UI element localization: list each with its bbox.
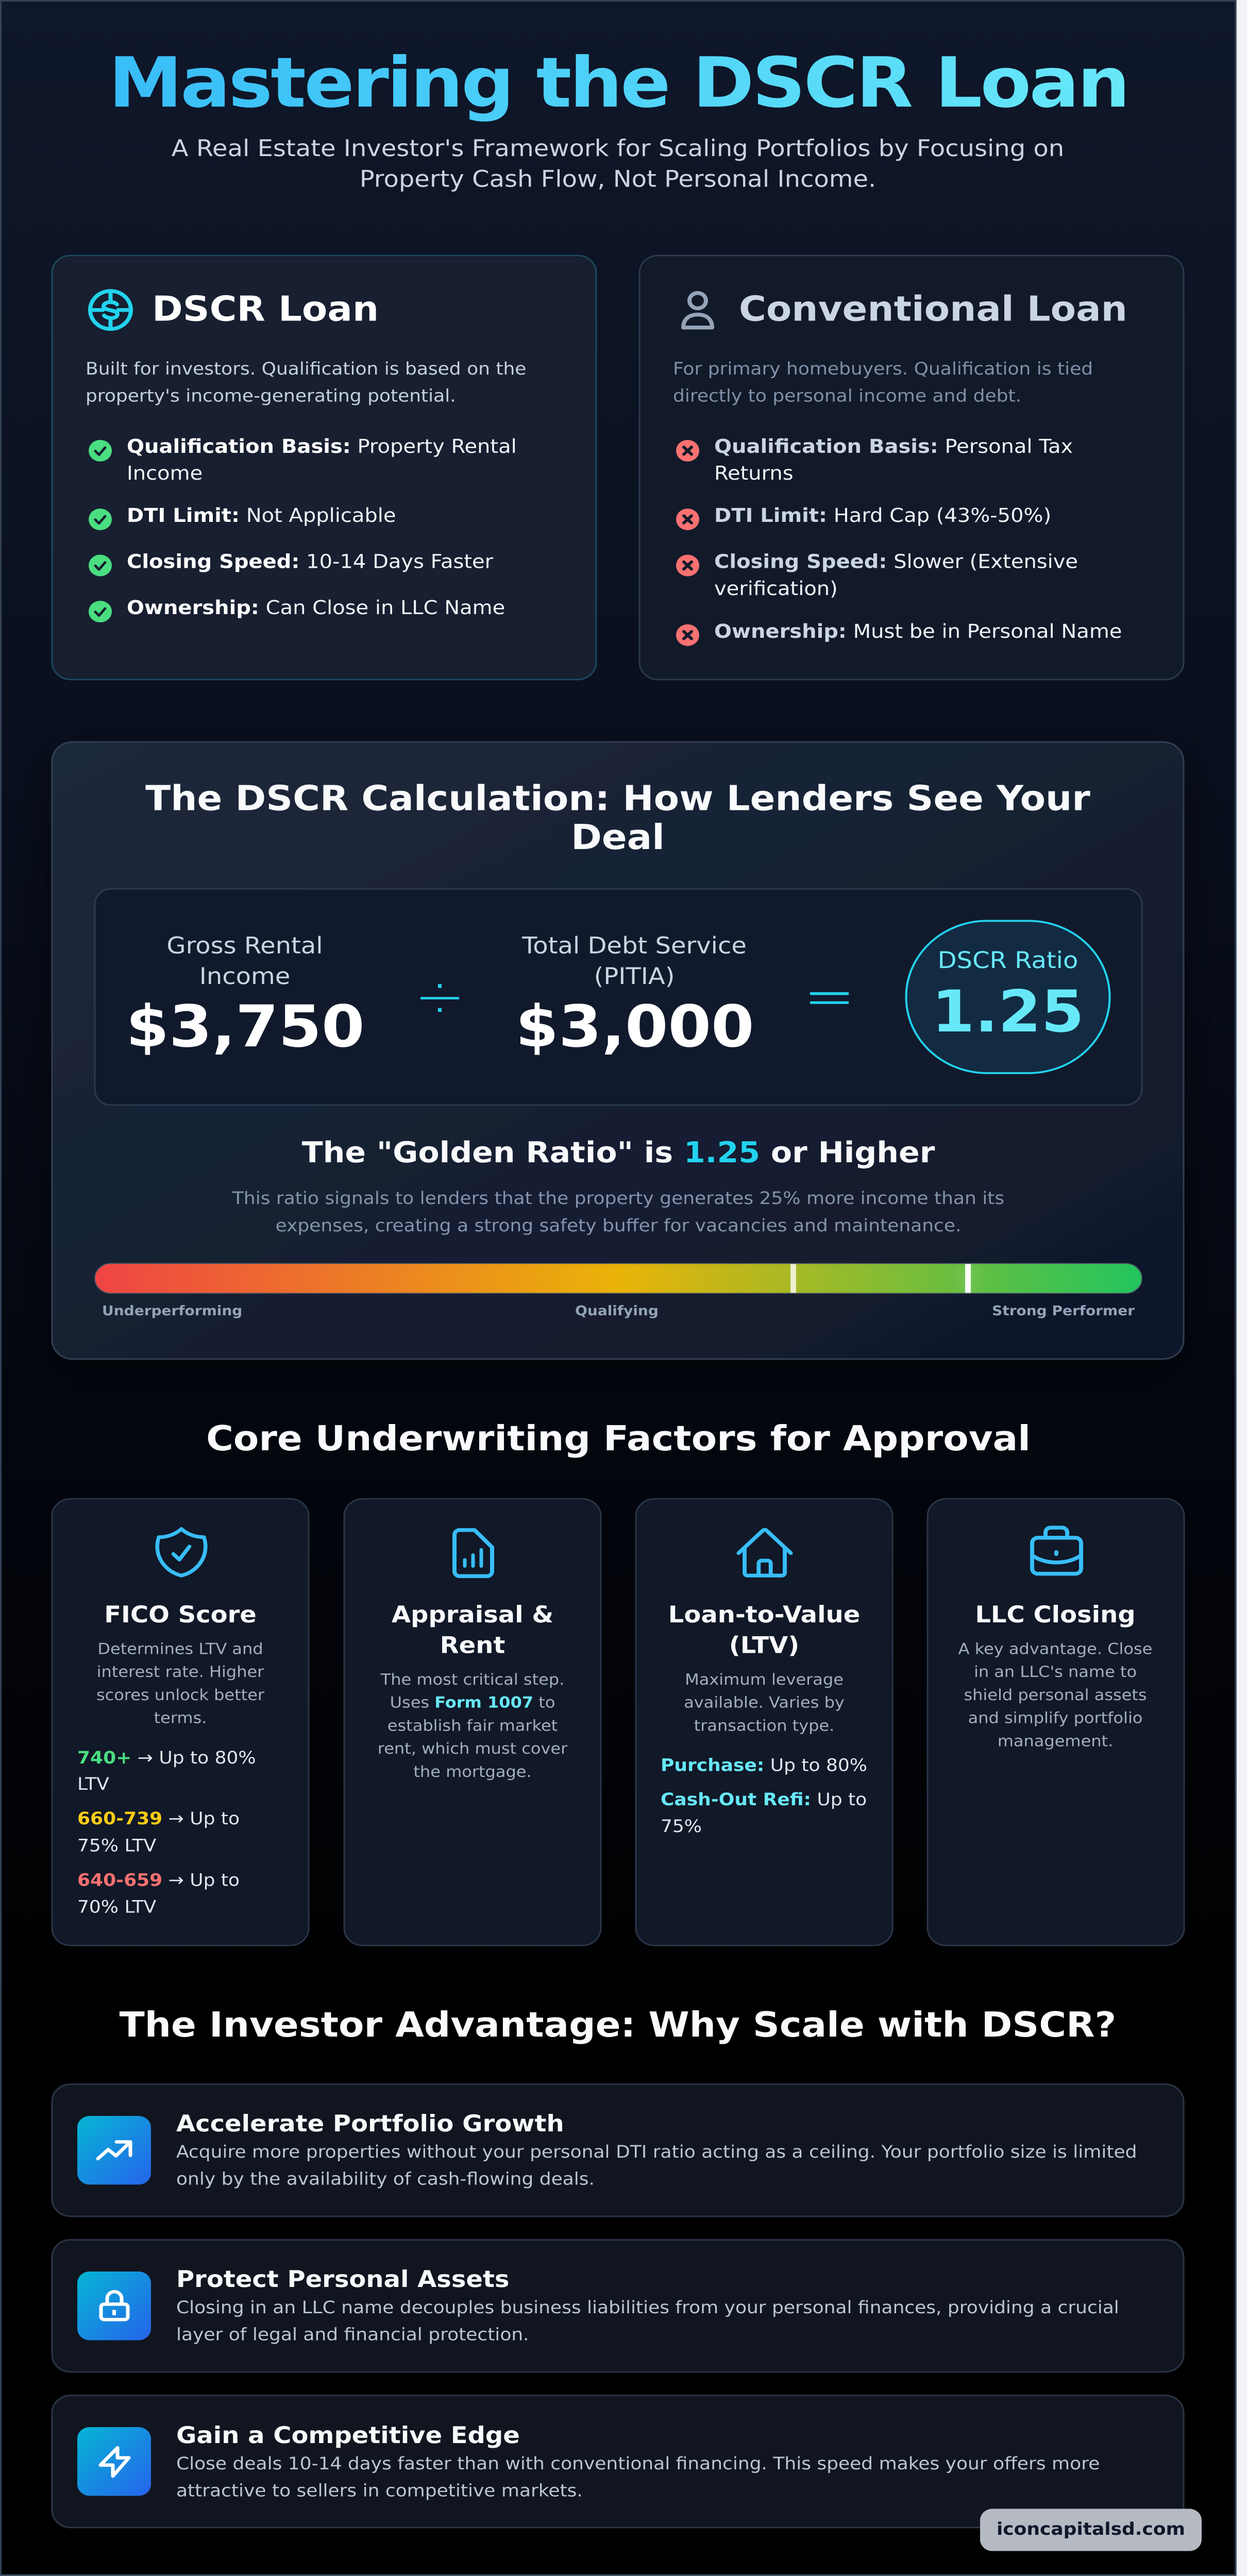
divide sign: [420, 984, 459, 1012]
item: closing speed: Closing Speed: Slower (Extensive: [714, 551, 1078, 573]
heading: DSCR Loan: [152, 289, 379, 329]
icon: document chart: [454, 1530, 492, 1576]
heading: Conventional Loan: [739, 289, 1127, 329]
golden ratio explanation: This ratio signals to lenders that the property generates 25% more income than its: [232, 1189, 1004, 1208]
total debt service: (PITIA): [594, 963, 675, 990]
card: LLC closing: [928, 1499, 1184, 1945]
golden ratio explanation: expenses, creating a strong safety buffer for vacancies and maintenance.: [276, 1216, 961, 1235]
item: ownership: Ownership: Must be in Personal Name: [714, 620, 1122, 642]
subtitle: Property Cash Flow, Not Personal Income.: [360, 166, 876, 193]
heading: (LTV): [729, 1632, 799, 1659]
heading: Gain a Competitive Edge: [176, 2422, 520, 2449]
description: The most critical step.: [380, 1670, 564, 1688]
description: For primary homebuyers. Qualification is tied: [673, 359, 1093, 379]
description: Maximum leverage: [685, 1670, 844, 1688]
icon: house: [738, 1530, 791, 1575]
gradient gauge: [95, 1263, 1142, 1293]
icon: bolt: [77, 2427, 151, 2496]
description: rent, which must cover: [378, 1739, 568, 1758]
icon: dollar target: [90, 291, 131, 329]
header: [109, 42, 1128, 193]
card: protect personal assets: [52, 2240, 1184, 2372]
heading: Protect Personal Assets: [176, 2266, 509, 2293]
tiers: LTV: [77, 1774, 109, 1794]
heading: Appraisal &: [392, 1601, 553, 1628]
description: management.: [998, 1732, 1113, 1750]
description: and simplify portfolio: [968, 1709, 1142, 1727]
description: transaction type.: [694, 1716, 834, 1735]
gross rental income: Income: [199, 963, 290, 990]
heading: Rent: [440, 1632, 505, 1659]
item: qualification basis: Qualification Basis: Property Rental: [127, 435, 517, 457]
icon: shield: [157, 1529, 206, 1575]
description: in an LLC's name to: [974, 1663, 1137, 1681]
gauge labels: Strong Performer: [992, 1303, 1135, 1319]
description: A key advantage. Close: [958, 1639, 1152, 1658]
LTV limits: Cash-Out Refi: Up to: [661, 1790, 867, 1809]
heading: Loan-to-Value: [668, 1601, 860, 1628]
tiers: 740+ → Up to 80%: [77, 1748, 256, 1768]
description: Built for investors. Qualification is based on the: [86, 359, 526, 379]
icon: lock: [77, 2272, 151, 2340]
item: closing speed: Closing Speed: 10-14 Days Faster: [127, 551, 494, 573]
heading: Accelerate Portfolio Growth: [176, 2110, 564, 2137]
golden ratio heading: The "Golden Ratio" is 1.25 or Higher: [302, 1136, 935, 1170]
total debt service: [515, 932, 754, 1060]
item: ownership: Ownership: Can Close in LLC Name: [127, 597, 505, 619]
panel: conventional loan: [639, 256, 1184, 680]
description: interest rate. Higher: [97, 1663, 264, 1681]
tiers: 75% LTV: [77, 1836, 157, 1856]
website badge: [980, 2509, 1202, 2551]
cross list: [676, 435, 1122, 646]
LTV limits: 75%: [661, 1817, 702, 1837]
heading: underwriting factors: Core Underwriting Factors for Approval: [206, 1418, 1031, 1459]
description: only by the availability of cash-flowing deals.: [176, 2169, 595, 2189]
gauge labels: [102, 1303, 1135, 1319]
description: Uses Form 1007 to: [390, 1693, 555, 1711]
item: qualification basis: Income: [127, 463, 203, 485]
card: competitive edge: [52, 2396, 1184, 2528]
icon: person: [683, 293, 712, 328]
description: Close deals 10-14 days faster than with conventional financing. This speed makes your offers more: [176, 2454, 1100, 2473]
heading: Deal: [571, 817, 665, 857]
gross rental income: Gross Rental: [166, 932, 323, 959]
icon: briefcase: [1032, 1528, 1081, 1574]
description: layer of legal and financial protection.: [176, 2325, 529, 2345]
total debt service: Total Debt Service: [521, 932, 747, 959]
description: the mortgage.: [413, 1762, 532, 1781]
description: establish fair market: [387, 1716, 558, 1735]
item: closing speed: verification): [714, 578, 838, 600]
gauge labels: Underperforming: [102, 1303, 242, 1319]
LTV limits: Purchase: Up to 80%: [661, 1756, 867, 1775]
formula box: [95, 889, 1142, 1105]
item: DTI limit: DTI Limit: Not Applicable: [127, 505, 396, 527]
description: property's income-generating potential.: [86, 386, 456, 406]
tiers: 660-739 → Up to: [77, 1809, 240, 1829]
heading: The DSCR Calculation: How Lenders See Your: [145, 778, 1090, 818]
card: FICO score: [52, 1499, 309, 1945]
description: Acquire more properties without your personal DTI ratio acting as a ceiling. Your portfolio size is limited: [176, 2142, 1137, 2162]
item: qualification basis: [676, 435, 1073, 485]
item: qualification basis: Returns: [714, 463, 794, 485]
title: Mastering the DSCR Loan: [109, 42, 1128, 123]
card: appraisal and rent: [344, 1499, 601, 1945]
tiers: 70% LTV: [77, 1897, 157, 1917]
item: closing speed: [676, 551, 1078, 600]
DSCR ratio badge: [906, 921, 1110, 1073]
heading: investor advantage: The Investor Advantage: Why Scale with DSCR?: [120, 2005, 1116, 2045]
item: qualification basis: Qualification Basis: Personal Tax: [714, 435, 1073, 457]
LTV limits: [661, 1756, 867, 1837]
description: available. Varies by: [684, 1693, 845, 1711]
heading: FICO Score: [104, 1601, 257, 1628]
total debt service: $3,000: [515, 994, 754, 1060]
card: accelerate portfolio growth: [52, 2084, 1184, 2216]
tiers: [77, 1748, 256, 1917]
description: Closing in an LLC name decouples business liabilities from your personal finances, providing a crucial: [176, 2298, 1119, 2318]
website badge: iconcapitalsd.com: [997, 2519, 1185, 2539]
description: directly to personal income and debt.: [673, 386, 1021, 406]
subtitle: A Real Estate Investor's Framework for Scaling Portfolios by Focusing on: [172, 135, 1064, 162]
description: attractive to sellers in competitive markets.: [176, 2481, 583, 2501]
panel: DSCR calculation: [52, 742, 1184, 1359]
panel: DSCR loan: [52, 256, 596, 680]
tiers: 640-659 → Up to: [77, 1871, 240, 1890]
DSCR ratio badge: DSCR Ratio: [938, 947, 1078, 974]
description: Determines LTV and: [97, 1639, 263, 1658]
description: shield personal assets: [964, 1686, 1147, 1704]
equals sign: [810, 992, 849, 1004]
check list: [89, 435, 517, 622]
card: loan to value: [636, 1499, 892, 1945]
icon: trend up: [77, 2116, 151, 2184]
item: qualification basis: [89, 435, 517, 485]
gross rental income: $3,750: [126, 994, 365, 1060]
description: terms.: [154, 1709, 207, 1727]
DSCR ratio badge: 1.25: [932, 979, 1084, 1045]
gauge labels: Qualifying: [575, 1303, 659, 1319]
gross rental income: [126, 932, 365, 1060]
heading: LLC Closing: [975, 1601, 1136, 1628]
item: DTI limit: DTI Limit: Hard Cap (43%-50%): [714, 505, 1051, 527]
description: scores unlock better: [96, 1686, 265, 1704]
